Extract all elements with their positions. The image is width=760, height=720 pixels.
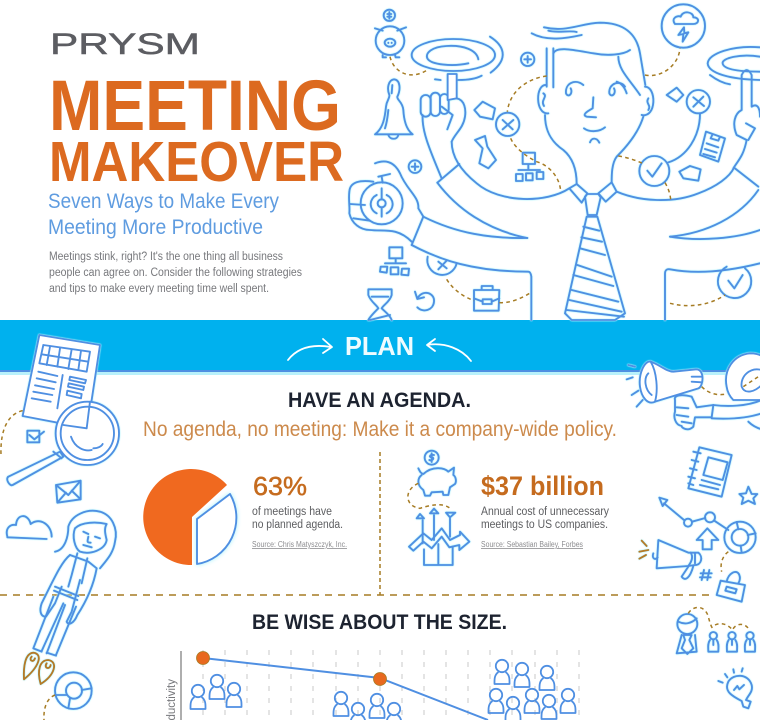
intro text: and tips to make every meeting time well spent. [49, 283, 269, 295]
left upper arm and hand [421, 74, 569, 238]
icon: hash [700, 570, 712, 580]
people: small group [190, 675, 242, 709]
trend line [203, 658, 488, 720]
icon: cloud circle [662, 4, 705, 48]
icon: agenda document [23, 335, 100, 428]
heading: have an agenda: HAVE AN AGENDA. [288, 389, 471, 412]
icon: donut right [724, 522, 756, 553]
connector: solid arc [668, 113, 700, 162]
face [538, 82, 653, 184]
arm and swirl top right [712, 353, 760, 429]
lower left hand with stopwatch [349, 161, 531, 320]
icon: donut [55, 672, 92, 709]
connector: left dashed paths [1, 411, 55, 720]
icon: document [700, 132, 725, 162]
stat: 63 percent [252, 471, 347, 549]
icon: small tie [475, 136, 496, 168]
stat number: $37 billion [481, 471, 604, 501]
icon: light bulb [718, 668, 752, 708]
heading: be wise about the size: BE WISE ABOUT THE SIZE. [252, 611, 507, 634]
icon: tags [474, 88, 701, 181]
subtitle line 2: Meeting More Productive [48, 216, 263, 239]
pie chart: 63 percent [143, 469, 236, 565]
woman with rockets [33, 511, 116, 656]
tagline: No agenda, no meeting: Make it a company-wide policy. [143, 417, 617, 441]
icon: hourglass [368, 289, 392, 320]
icon: orange rays [639, 541, 648, 559]
stat: 63 percent: no planned agenda. [252, 519, 343, 531]
spinning plate left [412, 37, 503, 80]
icon: coin [425, 451, 439, 465]
divider: vertical dashed [379, 452, 381, 595]
icon: star [739, 487, 757, 504]
icon: org charts [380, 153, 543, 275]
hair [532, 23, 645, 95]
stat description: of meetings have [252, 506, 332, 518]
people: medium group [333, 692, 402, 720]
arrow right [427, 339, 471, 361]
stat source: Source: Chris Matyszczyk, Inc. [252, 540, 347, 549]
collar and tie [565, 182, 625, 320]
icon: magnifier [7, 402, 119, 485]
pie slice: outlined [197, 494, 236, 564]
icon: bell [375, 79, 413, 139]
stat number: 63% [253, 471, 307, 501]
icon: briefcase [474, 286, 499, 311]
divider: horizontal dashed [0, 594, 713, 596]
icon: cross circles [427, 90, 710, 275]
logo: Prysm: PRYSM [50, 28, 200, 61]
icon: plus [409, 53, 534, 173]
icon: chart with arrows [409, 509, 469, 565]
data point 1 [196, 652, 210, 664]
stat: 37 billion [481, 471, 609, 549]
subtitle line 1: Seven Ways to Make Every [48, 190, 279, 213]
intro text [49, 251, 302, 295]
line chart: productivity vs size [166, 650, 579, 720]
right arms [617, 70, 760, 320]
icon: manager and team [677, 614, 755, 654]
intro text: Meetings stink, right? It's the one thing all business [49, 251, 283, 263]
stat: 37 billion: meetings to US companies. [481, 519, 608, 531]
pie slice: orange [143, 469, 227, 565]
grid lines [203, 650, 579, 720]
icon: checkbox [27, 431, 44, 442]
icon: rockets [24, 653, 54, 684]
icon: megaphone top [627, 362, 713, 429]
icon: piggy bank [375, 10, 406, 57]
banner heading: PLAN [345, 331, 414, 361]
icon: briefcase right [717, 572, 745, 602]
arrow left [288, 339, 332, 360]
connector: hero dashed paths [390, 48, 725, 306]
icon: small megaphone [653, 540, 701, 579]
title [49, 67, 344, 194]
data point 2 [374, 672, 386, 686]
icon: piggy [418, 468, 456, 496]
icon: cloud [7, 516, 52, 539]
icon: check circles [639, 156, 751, 298]
people: large group [488, 660, 576, 720]
illustration: businessman [349, 4, 760, 320]
stat description: Annual cost of unnecessary [481, 506, 609, 518]
banner: plan [0, 320, 760, 375]
stat source: Source: Sebastian Bailey, Forbes [481, 540, 583, 549]
y axis [180, 651, 182, 720]
intro text: people can agree on. Consider the following strategies [49, 267, 302, 279]
illustration: left column [7, 335, 119, 709]
spinning plate right [708, 47, 760, 84]
connector: right dashed paths [408, 377, 758, 630]
icon: undo arrow [415, 292, 434, 310]
icon: notebook [688, 447, 732, 497]
title line 2: MAKEOVER [49, 130, 344, 194]
illustration: middle and right icons [409, 353, 760, 708]
title line 1: MEETING [49, 67, 341, 146]
subtitle [48, 190, 279, 239]
icon: network arrow [659, 498, 728, 549]
icon: envelope [56, 481, 81, 503]
